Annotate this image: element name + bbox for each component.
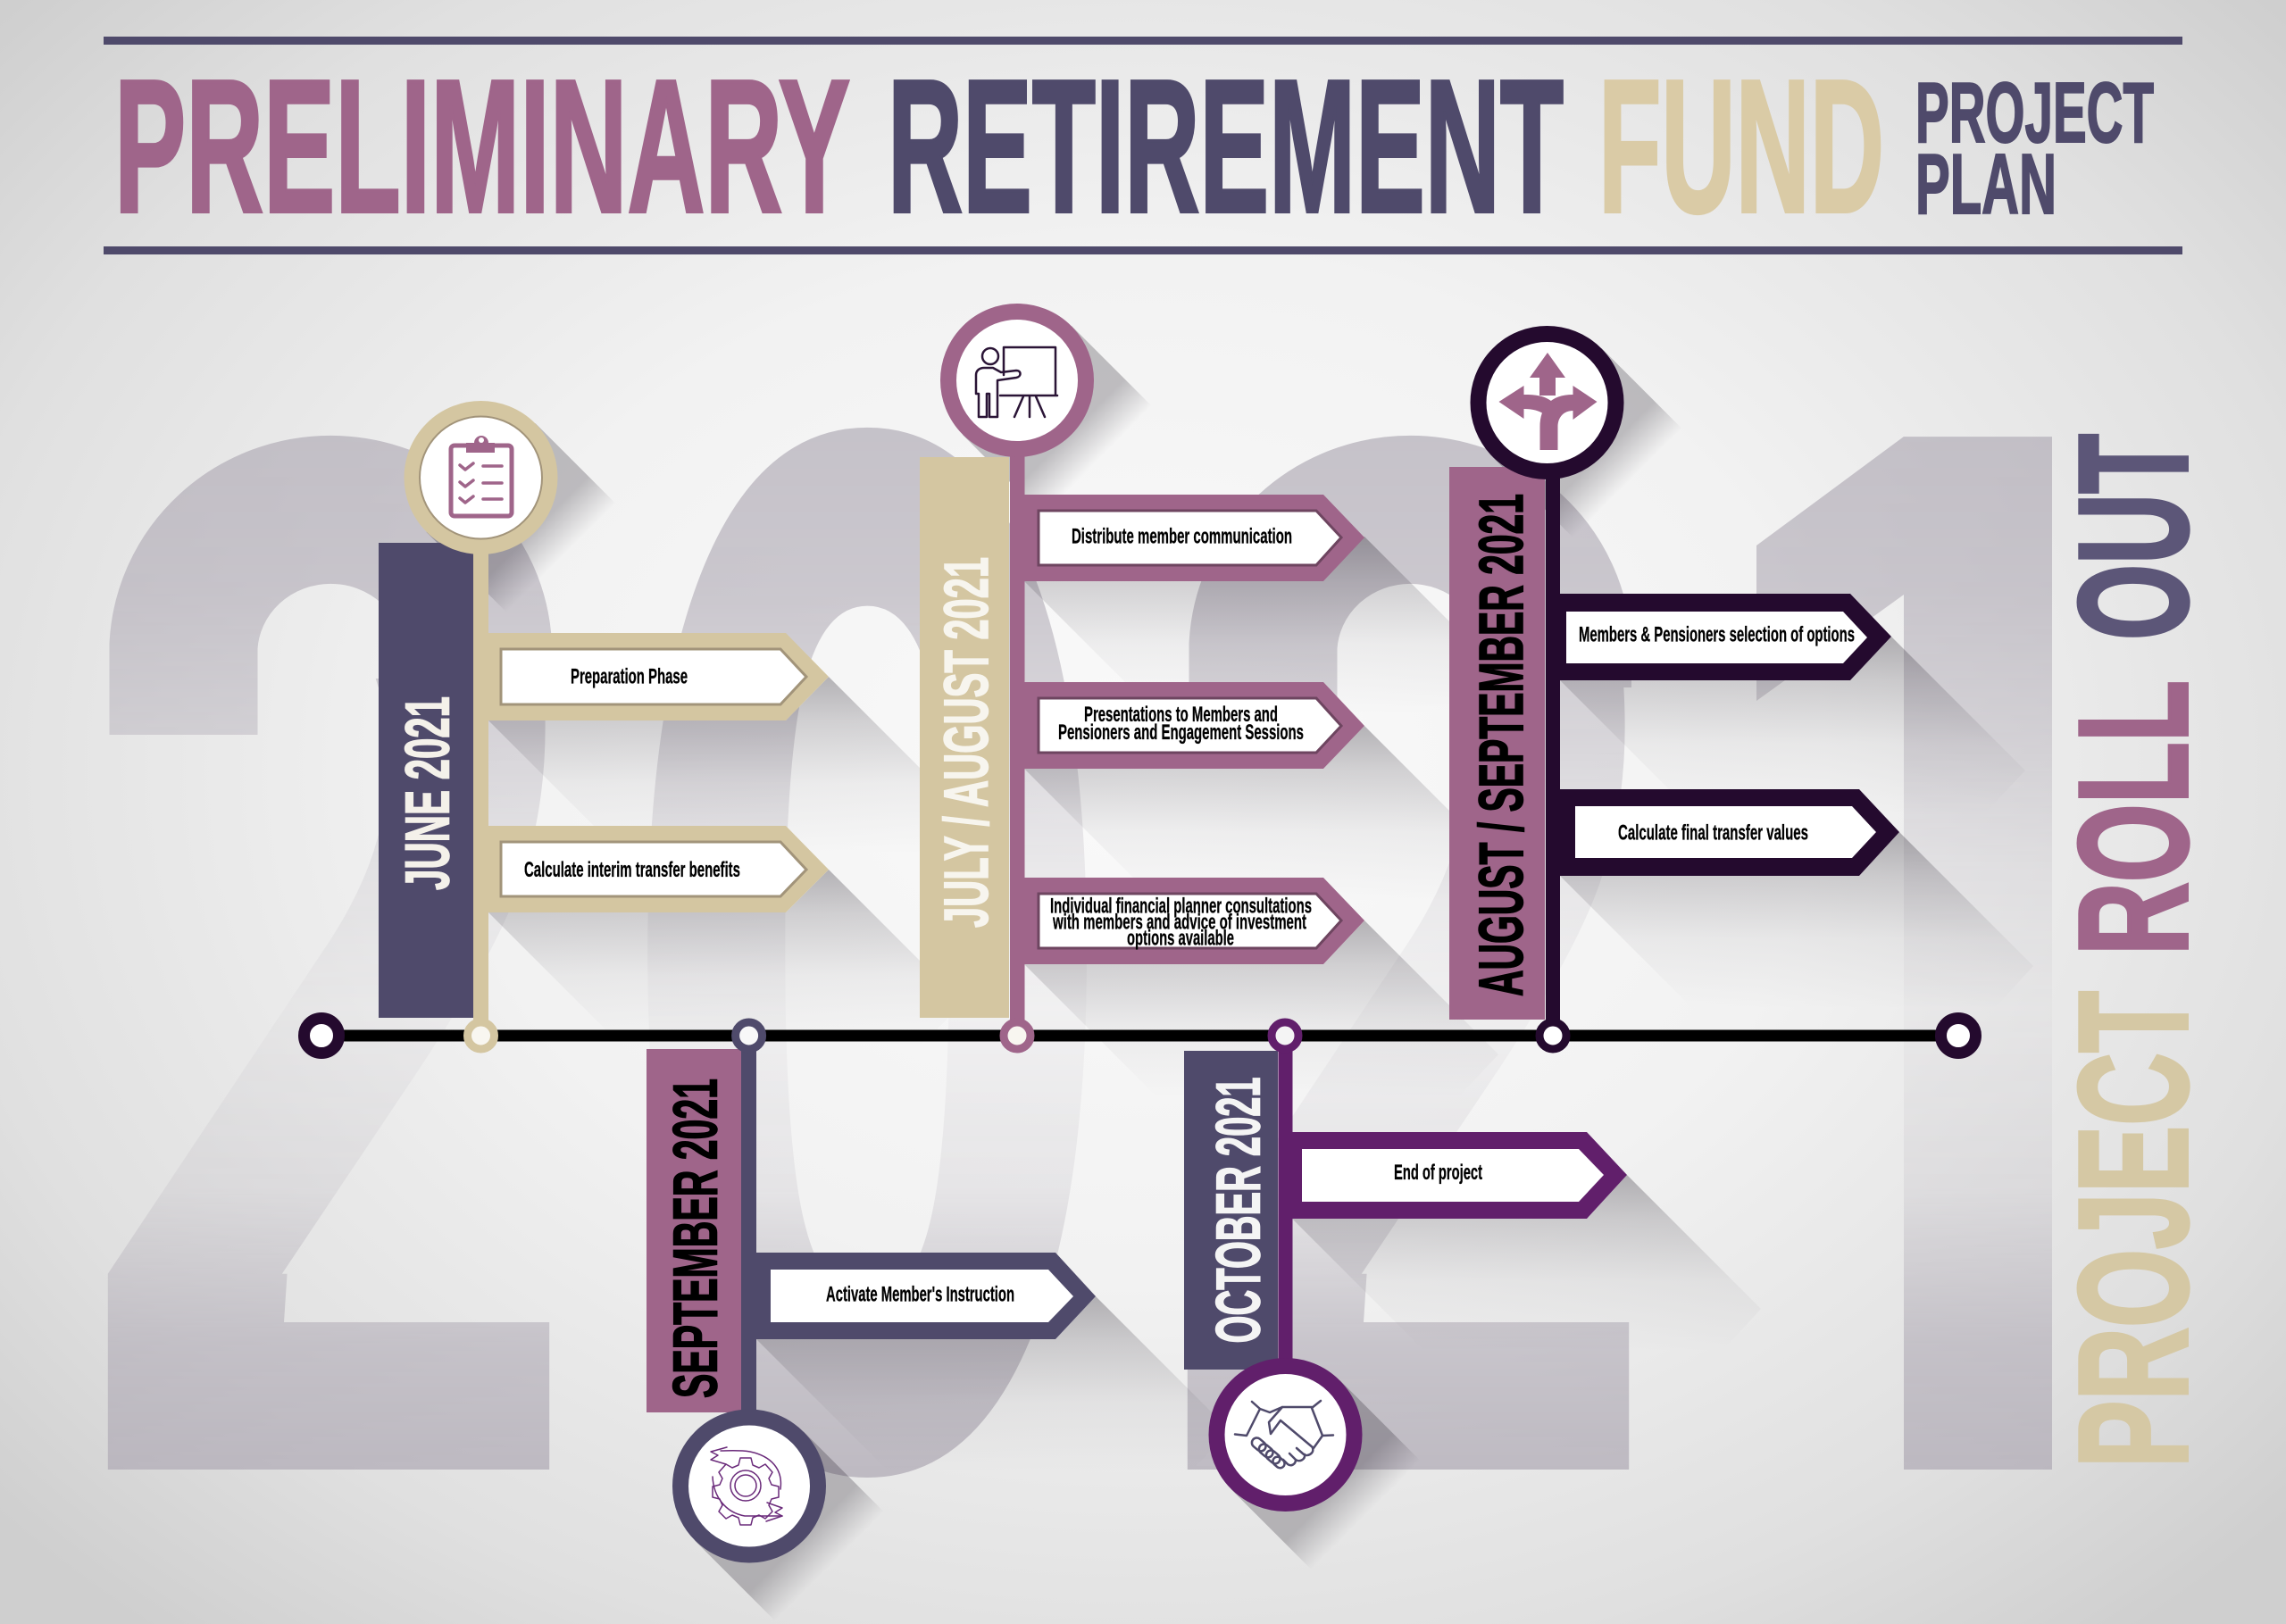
- title word preliminary: PRELIMINARY: [114, 40, 850, 252]
- milestone: july august 2021: [920, 312, 1364, 1049]
- side word out: OUT: [2046, 434, 2220, 640]
- arrow: end of project: [1290, 1132, 1627, 1219]
- date bar september: [647, 1049, 741, 1412]
- stem july august: [1010, 446, 1025, 1027]
- arrow: presentations: Pensioners and Engagement Sessions: [1058, 720, 1304, 745]
- milestone: october 2021: [1184, 1022, 1627, 1503]
- arrow: distribute member communication: Distribute member communication: [1072, 525, 1292, 548]
- arrow: presentations: Presentations to Members and: [1084, 703, 1278, 727]
- title rule top: [104, 37, 2182, 45]
- arrow: calculate final transfer values: Calculate final transfer values: [1618, 821, 1808, 845]
- arrow: activate member instruction: [755, 1253, 1096, 1339]
- date bar july august: [920, 457, 1009, 1018]
- side word project: PROJECT: [2046, 991, 2220, 1468]
- date label july august: JULY / AUGUST 2021: [931, 557, 1001, 928]
- arrow: end of project: End of project: [1394, 1161, 1482, 1185]
- title word retirement: RETIREMENT: [888, 40, 1564, 252]
- arrow: calculate final transfer values: [1558, 789, 1899, 876]
- arrow: individual financial planner: options available: [1127, 927, 1234, 950]
- arrow: individual financial planner: with members and advice of investment: [1052, 911, 1306, 934]
- long shadows: [427, 326, 2033, 1623]
- arrow: preparation phase: Preparation Phase: [571, 664, 688, 689]
- arrow: calculate interim transfer benefits: [487, 826, 829, 912]
- timeline: [304, 1018, 1975, 1054]
- arrow: presentations: [1022, 682, 1364, 769]
- node october: [1272, 1022, 1298, 1049]
- icon circle: presenter: [948, 312, 1086, 449]
- arrow: preparation phase: [487, 633, 829, 720]
- arrow: individual financial planner: [1022, 878, 1364, 964]
- node september: [736, 1022, 763, 1049]
- timeline end node: [1941, 1018, 1975, 1054]
- icon circle: direction arrows: [1479, 334, 1616, 471]
- stem october: [1279, 1040, 1293, 1370]
- date bar august september: [1449, 467, 1545, 1020]
- icon circle: handshake: [1216, 1366, 1354, 1503]
- title rule bottom: [104, 246, 2182, 254]
- arrow: members and pensioners selection: [1558, 594, 1891, 680]
- stem september: [741, 1040, 756, 1415]
- icon circle: clipboard: [413, 409, 550, 546]
- node august september: [1539, 1022, 1566, 1049]
- stem august september: [1546, 464, 1560, 1027]
- node july august: [1004, 1022, 1030, 1049]
- title subtitle plan: PLAN: [1915, 137, 2057, 232]
- arrow: activate member instruction: Activate Member's Instruction: [826, 1282, 1014, 1307]
- side word roll: ROLL: [2046, 680, 2220, 955]
- stem june: [473, 536, 488, 1027]
- date bar october: [1184, 1051, 1278, 1370]
- date label september: SEPTEMBER 2021: [661, 1079, 730, 1398]
- title: [104, 37, 2182, 254]
- milestone: august september 2021: [1449, 334, 1899, 1049]
- arrow: distribute member communication: [1022, 495, 1364, 581]
- date label october: OCTOBER 2021: [1203, 1077, 1272, 1343]
- arrow: individual financial planner: Individual financial planner consultations: [1050, 895, 1312, 918]
- date bar june: [379, 543, 473, 1018]
- side heading project roll out: [2046, 434, 2220, 1468]
- arrow: calculate interim transfer benefits: Calculate interim transfer benefits: [524, 858, 740, 882]
- arrow: members and pensioners selection: Members & Pensioners selection of options: [1579, 623, 1855, 646]
- date label june: JUNE 2021: [393, 696, 463, 890]
- milestone: september 2021: [647, 1022, 1096, 1555]
- icon circle: gear: [680, 1418, 818, 1555]
- node june: [468, 1022, 495, 1049]
- date label august september: AUGUST / SEPTEMBER 2021: [1466, 494, 1536, 996]
- timeline start node: [304, 1018, 339, 1054]
- milestone: june 2021: [379, 409, 829, 1049]
- title word fund: FUND: [1598, 40, 1884, 252]
- watermark year 2021: [107, 427, 2052, 1478]
